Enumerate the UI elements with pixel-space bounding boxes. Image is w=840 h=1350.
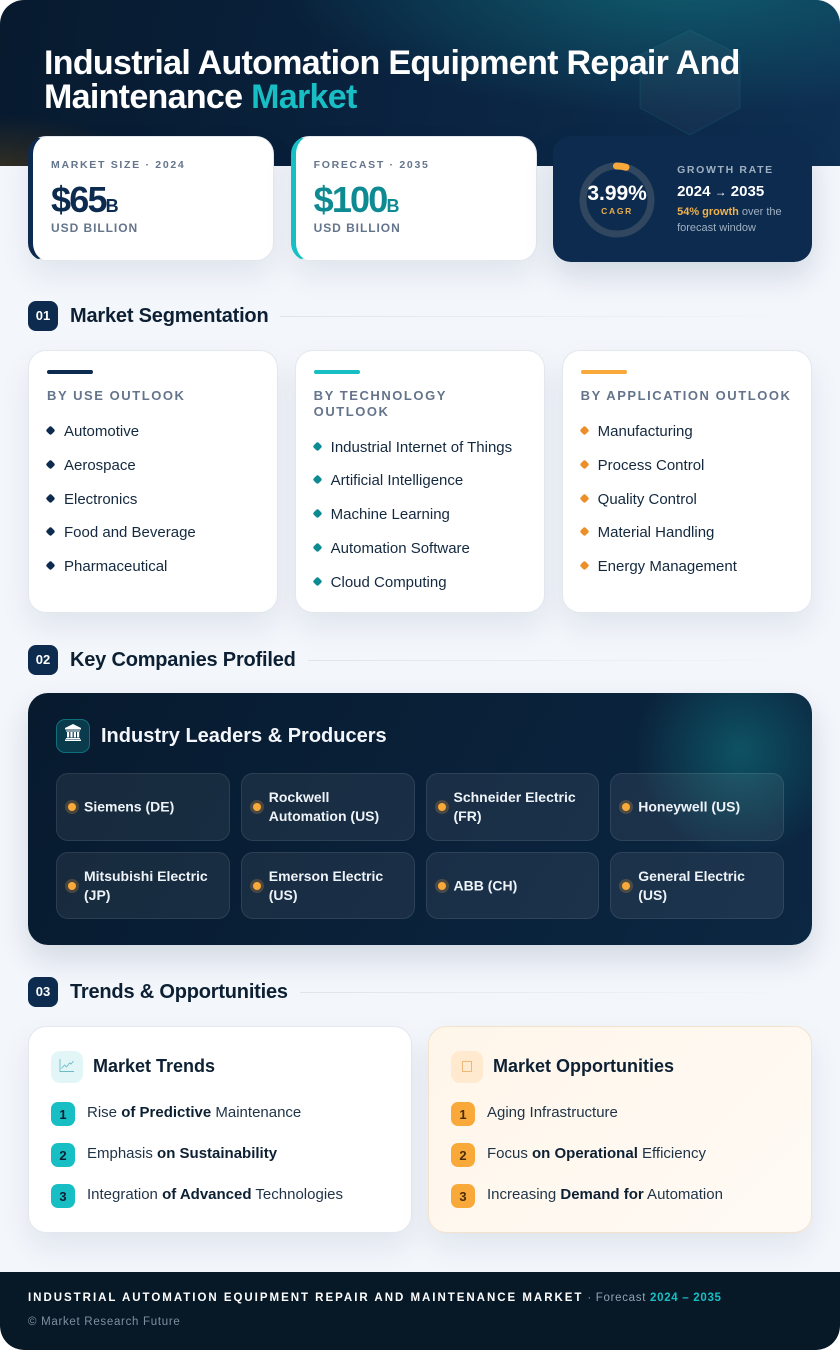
growth period: 2024 → 2035 — [677, 183, 764, 200]
panel: by application outlook: BY APPLICATION OUTLOOK — [581, 388, 791, 403]
panel: by application outlook: Energy Management — [598, 558, 737, 575]
stat card: forecast — [291, 136, 537, 261]
panel: market opportunities: 2 — [459, 1148, 467, 1163]
panel: by use outlook: Automotive — [64, 422, 139, 440]
company: Schneider: Schneider Electric (FR) — [454, 789, 576, 824]
title — [44, 44, 740, 116]
stat card: market size: $65B — [51, 179, 119, 220]
stat card: forecast: USD BILLION — [314, 221, 401, 235]
stat card: market size: MARKET SIZE · 2024 — [51, 158, 185, 170]
panel: industry leaders — [28, 693, 812, 945]
stat card: growth rate — [553, 136, 812, 262]
panel: market trends: Integration of Advanced Technologies — [87, 1186, 343, 1203]
panel: by technology outlook — [295, 350, 545, 613]
panel: by technology outlook: Industrial Internet of Things — [331, 438, 512, 456]
stat card: market size — [28, 136, 274, 261]
header banner — [0, 0, 840, 166]
panel: market opportunities: Aging Infrastructure — [487, 1104, 618, 1121]
icon: opportunity — [451, 1051, 483, 1083]
panel: market opportunities: Market Opportunities — [493, 1056, 674, 1076]
icon: chart — [51, 1051, 83, 1083]
panel: by technology outlook: Automation Software — [331, 540, 470, 557]
panel: market opportunities: 3 — [459, 1189, 467, 1204]
panel: by application outlook: Manufacturing — [598, 422, 693, 440]
icon: institution — [56, 719, 90, 753]
panel: by use outlook: Electronics — [64, 490, 137, 508]
section heading: key companies: 02 — [36, 652, 50, 667]
company: Siemens — [56, 773, 230, 841]
company: Siemens: Siemens (DE) — [84, 798, 174, 814]
icon: hexagon decoration — [640, 30, 740, 136]
stat card: forecast: FORECAST · 2035 — [314, 158, 430, 170]
company: Honeywell: Honeywell (US) — [638, 798, 740, 814]
section heading: market segmentation: Market Segmentation — [70, 305, 268, 327]
company: Schneider — [426, 773, 599, 841]
panel: market trends: 3 — [59, 1189, 67, 1204]
company: Emerson — [241, 852, 414, 919]
company: General Electric: General Electric (US) — [638, 868, 745, 902]
title: Industrial Automation Equipment Repair And — [44, 44, 740, 82]
company: General Electric — [610, 852, 784, 919]
section heading: key companies: Key Companies Profiled — [70, 649, 296, 671]
company: ABB — [426, 852, 599, 919]
panel: market trends: Market Trends — [93, 1056, 215, 1076]
stat card: market size: USD BILLION — [51, 221, 138, 235]
panel: market opportunities: 1 — [459, 1107, 467, 1122]
panel: market trends: Emphasis on Sustainability — [87, 1145, 277, 1162]
panel: by use outlook — [28, 350, 278, 613]
panel: market trends — [28, 1026, 412, 1233]
panel: by technology outlook: Machine Learning — [331, 506, 450, 523]
footer title: INDUSTRIAL AUTOMATION EQUIPMENT REPAIR AND MAINTENANCE MARKET · Forecast 2024 – 2035 — [28, 1292, 722, 1304]
panel: market trends: 1 — [59, 1107, 67, 1122]
company: Emerson: Emerson Electric (US) — [269, 868, 383, 902]
panel: market opportunities — [428, 1026, 812, 1233]
section heading: trends — [28, 977, 604, 1007]
panel: by application outlook: Material Handling — [598, 524, 714, 541]
footer — [0, 1272, 840, 1350]
panel: by use outlook: Food and Beverage — [64, 524, 196, 541]
panel: market opportunities: Increasing Demand for Automation — [487, 1186, 723, 1203]
growth note: 54% growth over the forecast window — [677, 206, 782, 234]
company: ABB: ABB (CH) — [454, 877, 517, 893]
panel: by technology outlook: Cloud Computing — [331, 574, 447, 591]
section heading: key companies — [28, 645, 608, 675]
CAGR value: 3.99% — [587, 182, 647, 205]
panel heading: Industry Leaders & Producers — [101, 725, 387, 747]
section heading: market segmentation — [28, 301, 598, 331]
panel: by application outlook — [562, 350, 812, 613]
panel: by use outlook: Pharmaceutical — [64, 558, 167, 575]
section heading: trends: Trends & Opportunities — [70, 981, 288, 1003]
panel: by technology outlook: BY TECHNOLOGY OUTLOOK — [314, 388, 447, 419]
company: Honeywell — [610, 773, 784, 841]
title: Maintenance Market — [44, 78, 357, 116]
panel: market opportunities: Focus on Operational Efficiency — [487, 1145, 706, 1162]
panel: market trends: Rise of Predictive Maintenance — [87, 1104, 301, 1121]
stat card: forecast: $100B — [314, 179, 399, 220]
footer credit: © Market Research Future — [28, 1316, 180, 1328]
panel: market trends: 2 — [59, 1148, 67, 1163]
chart: CAGR ring — [580, 162, 654, 238]
company: Mitsubishi: Mitsubishi Electric (JP) — [84, 868, 208, 902]
section heading: market segmentation: 01 — [36, 308, 50, 323]
panel: by application outlook: Process Control — [598, 456, 704, 474]
growth label: GROWTH RATE — [677, 164, 774, 176]
company: Rockwell — [241, 773, 414, 841]
panel: by use outlook: BY USE OUTLOOK — [47, 388, 185, 403]
CAGR label: CAGR — [601, 206, 633, 216]
panel: by application outlook: Quality Control — [598, 490, 697, 508]
company: Rockwell: Rockwell Automation (US) — [269, 789, 379, 824]
panel: by use outlook: Aerospace — [64, 456, 136, 474]
section heading: trends: 03 — [36, 984, 50, 999]
company: Mitsubishi — [56, 852, 230, 919]
panel: by technology outlook: Artificial Intelligence — [331, 472, 463, 489]
